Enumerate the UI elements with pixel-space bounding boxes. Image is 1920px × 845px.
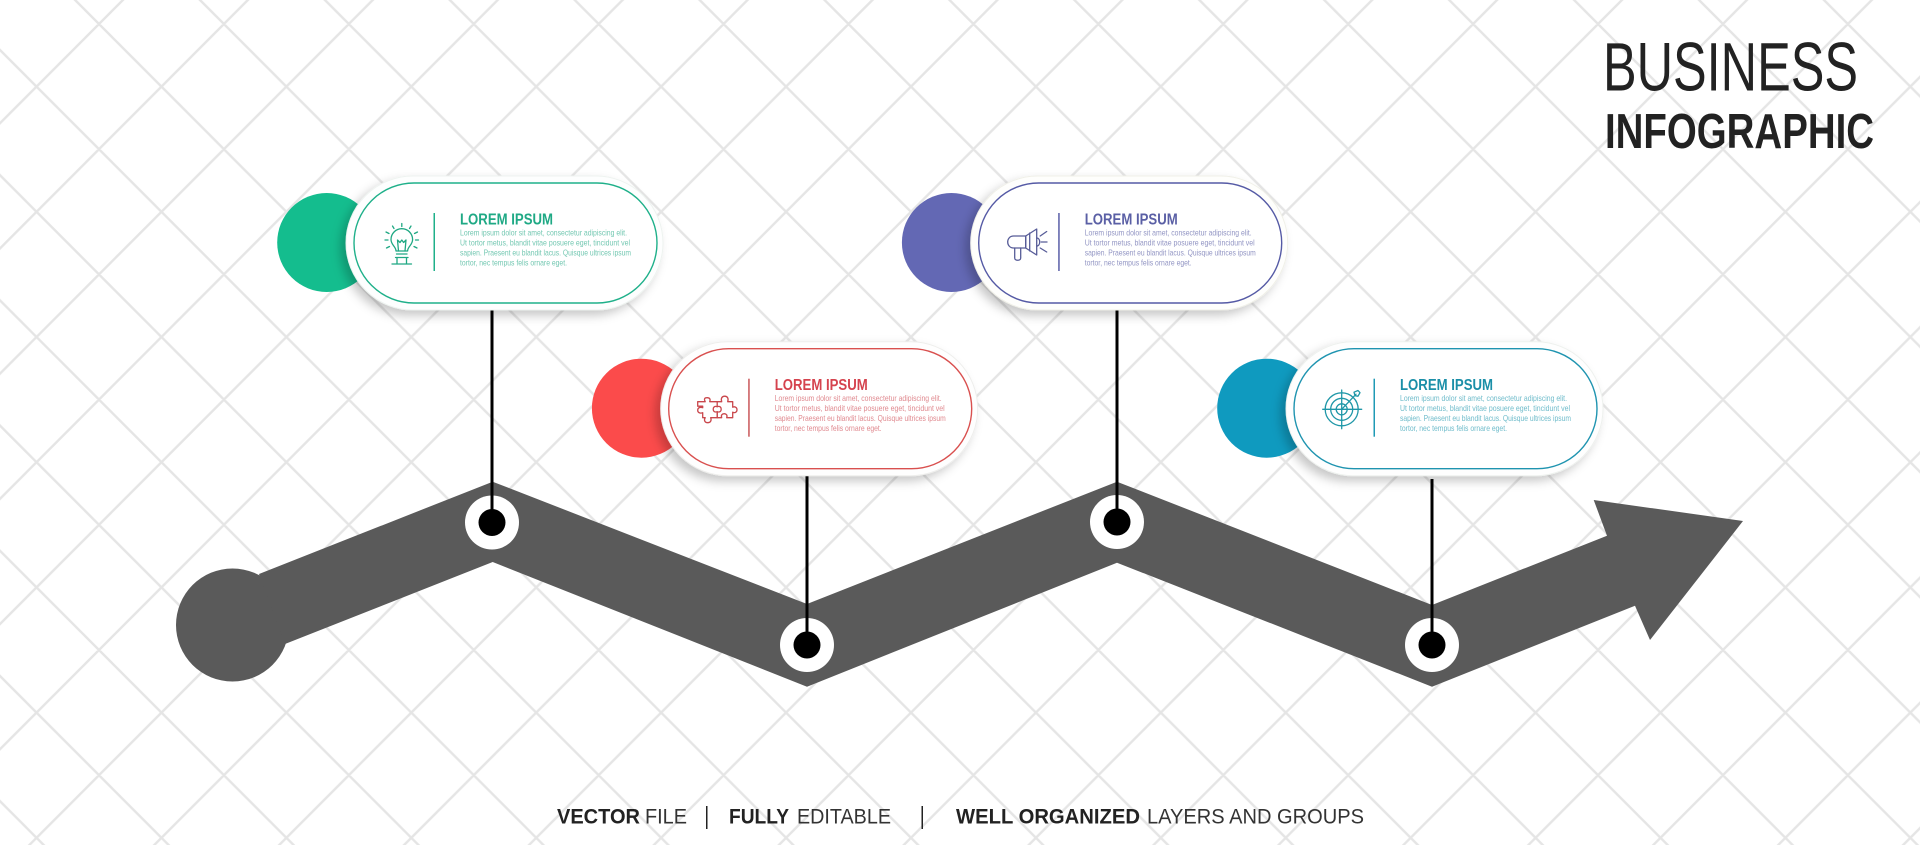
body text: Lorem ipsum dolor sit amet, consectetur adipiscing elit. (1400, 393, 1567, 403)
pill outline (346, 176, 663, 310)
colour disc (277, 193, 376, 292)
icon: megaphone (1008, 229, 1047, 260)
title (1603, 28, 1874, 159)
icon: target (1323, 390, 1362, 429)
body text: Lorem ipsum dolor sit amet, consectetur adipiscing elit. (1085, 228, 1252, 238)
heading: LOREM IPSUM (775, 377, 868, 394)
heading: LOREM IPSUM (1400, 377, 1493, 394)
footer strapline: WELL ORGANIZED (956, 806, 1140, 828)
panel: card 3 purple (902, 176, 1288, 310)
body text: sapien. Praesent eu blandit lacus. Quisque ultrices ipsum (1085, 248, 1256, 258)
icon: light bulb (385, 224, 418, 264)
marker 2 on timeline (780, 476, 834, 672)
footer strapline: EDITABLE (797, 806, 891, 828)
body text (775, 393, 946, 433)
footer strapline: VECTOR (557, 806, 640, 828)
body text (460, 228, 631, 268)
footer strapline (557, 806, 1364, 829)
body text: sapien. Praesent eu blandit lacus. Quisque ultrices ipsum (460, 248, 631, 258)
panel: card 4 teal (1217, 342, 1603, 476)
divider (1058, 213, 1060, 271)
panel: card 2 red (592, 342, 978, 476)
body text (1400, 393, 1571, 433)
body text: tortor, nec tempus felis ornare eget. (460, 258, 567, 268)
body text: Ut tortor metus, blandit vitae posuere eget, tincidunt vel (460, 238, 630, 248)
body text: Lorem ipsum dolor sit amet, consectetur adipiscing elit. (775, 393, 942, 403)
panel: card 1 green (277, 176, 663, 310)
body text: sapien. Praesent eu blandit lacus. Quisque ultrices ipsum (1400, 413, 1571, 423)
body text: tortor, nec tempus felis ornare eget. (775, 423, 882, 433)
zigzag arrow timeline (176, 482, 1743, 687)
body text (1085, 228, 1256, 268)
body text: sapien. Praesent eu blandit lacus. Quisque ultrices ipsum (775, 413, 946, 423)
colour disc (902, 193, 1001, 292)
marker 1 on timeline (465, 310, 519, 550)
divider (748, 379, 750, 437)
body text: Ut tortor metus, blandit vitae posuere eget, tincidunt vel (1400, 403, 1570, 413)
body text: Ut tortor metus, blandit vitae posuere eget, tincidunt vel (775, 403, 945, 413)
body text: tortor, nec tempus felis ornare eget. (1085, 258, 1192, 268)
body text: tortor, nec tempus felis ornare eget. (1400, 423, 1507, 433)
body text: Lorem ipsum dolor sit amet, consectetur adipiscing elit. (460, 228, 627, 238)
colour disc (1217, 359, 1316, 458)
heading: LOREM IPSUM (1085, 212, 1178, 228)
pill outline (661, 342, 978, 476)
pill outline (1286, 342, 1603, 476)
divider (1374, 379, 1375, 437)
footer strapline: FILE (645, 806, 687, 828)
footer strapline: FULLY (729, 806, 789, 828)
footer strapline: LAYERS AND GROUPS (1147, 806, 1364, 828)
marker 3 on timeline (1090, 310, 1144, 549)
body text: Ut tortor metus, blandit vitae posuere eget, tincidunt vel (1085, 238, 1255, 248)
icon: puzzle (698, 396, 737, 423)
colour disc (592, 359, 691, 458)
heading: LOREM IPSUM (460, 212, 553, 228)
pill outline (971, 176, 1288, 310)
divider (434, 213, 435, 271)
marker 4 on timeline (1405, 479, 1459, 672)
